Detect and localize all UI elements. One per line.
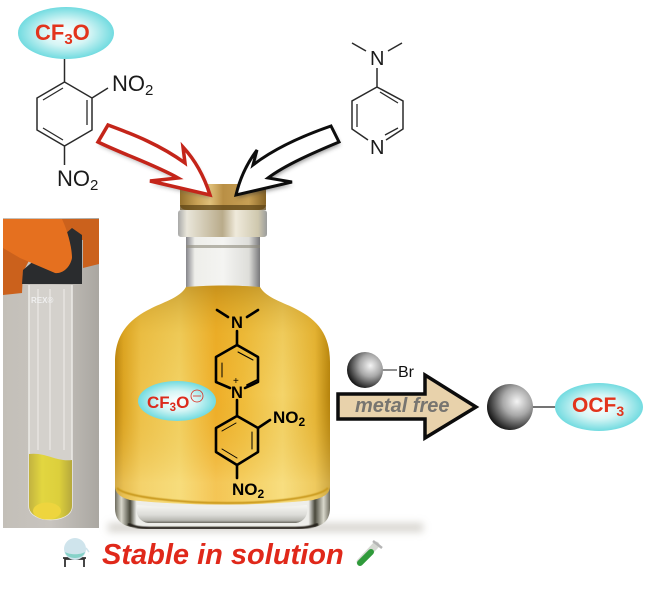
cation labels: N — [231, 384, 243, 402]
CF3O anion ellipse — [138, 381, 216, 421]
CF3O anion ellipse: 3 — [170, 402, 176, 414]
OCF3 ellipse — [555, 383, 643, 431]
liquid — [115, 286, 330, 504]
neck ring — [178, 210, 267, 237]
CF3O ellipse label: 3 — [64, 31, 73, 48]
dinitrobenzene structure — [37, 59, 153, 194]
black tube cap — [22, 228, 82, 284]
dimethylaminopyridine structure: N — [370, 48, 384, 70]
sphere with Br: Br — [398, 364, 415, 381]
CF3O anion ellipse: O — [176, 393, 189, 412]
cation labels: N — [231, 314, 243, 332]
CF3O ellipse label: CF — [35, 20, 64, 45]
OCF3 ellipse: OCF — [572, 394, 616, 417]
tube label text: REX® — [31, 296, 53, 305]
cork cap — [180, 184, 266, 210]
reaction arrow metal free: metal free — [355, 395, 450, 417]
black arrow — [236, 126, 340, 198]
CF3O ellipse label: O — [73, 20, 90, 45]
cation labels: 2 — [258, 487, 264, 501]
dinitrobenzene structure: NO — [57, 166, 90, 191]
bottle glass base — [115, 485, 330, 528]
dinitrobenzene structure: NO — [112, 71, 145, 96]
cation labels: 2 — [298, 415, 306, 429]
liquid bottom rim — [117, 488, 328, 503]
stable in solution text: Stable in solution — [102, 539, 344, 571]
back glove — [3, 219, 99, 295]
dimethylaminopyridine structure — [352, 43, 403, 159]
bottle floor shadow — [108, 523, 423, 532]
cation labels: NO — [232, 480, 258, 499]
glass neck — [186, 235, 260, 291]
reaction arrow metal free — [338, 375, 476, 438]
orange glove finger — [3, 219, 72, 273]
test tube photo — [3, 218, 99, 528]
dinitrobenzene structure: 2 — [90, 177, 98, 194]
yellow solid at the bottom — [33, 502, 61, 520]
product sphere with OCF3 — [487, 383, 643, 431]
inner base highlight — [137, 505, 307, 523]
cation structure in bottle — [216, 310, 270, 478]
cation labels — [231, 314, 306, 501]
sphere with Br — [347, 352, 415, 388]
dimethylaminopyridine structure: N — [370, 137, 384, 159]
icon: flask on stand — [63, 538, 89, 567]
base dark bottom edge — [128, 524, 318, 528]
red arrow — [98, 125, 211, 198]
icon: green test tube — [360, 541, 382, 563]
CF3O anion ellipse: CF — [147, 393, 170, 412]
yellow solution — [29, 454, 72, 520]
OCF3 ellipse: 3 — [616, 403, 624, 419]
cation labels: NO — [273, 408, 298, 427]
bottle — [108, 184, 423, 532]
CF3O ellipse label — [18, 7, 114, 59]
dinitrobenzene structure: 2 — [145, 82, 153, 99]
cation labels: + — [233, 376, 239, 387]
caption — [63, 538, 382, 571]
glass tube — [29, 285, 72, 520]
